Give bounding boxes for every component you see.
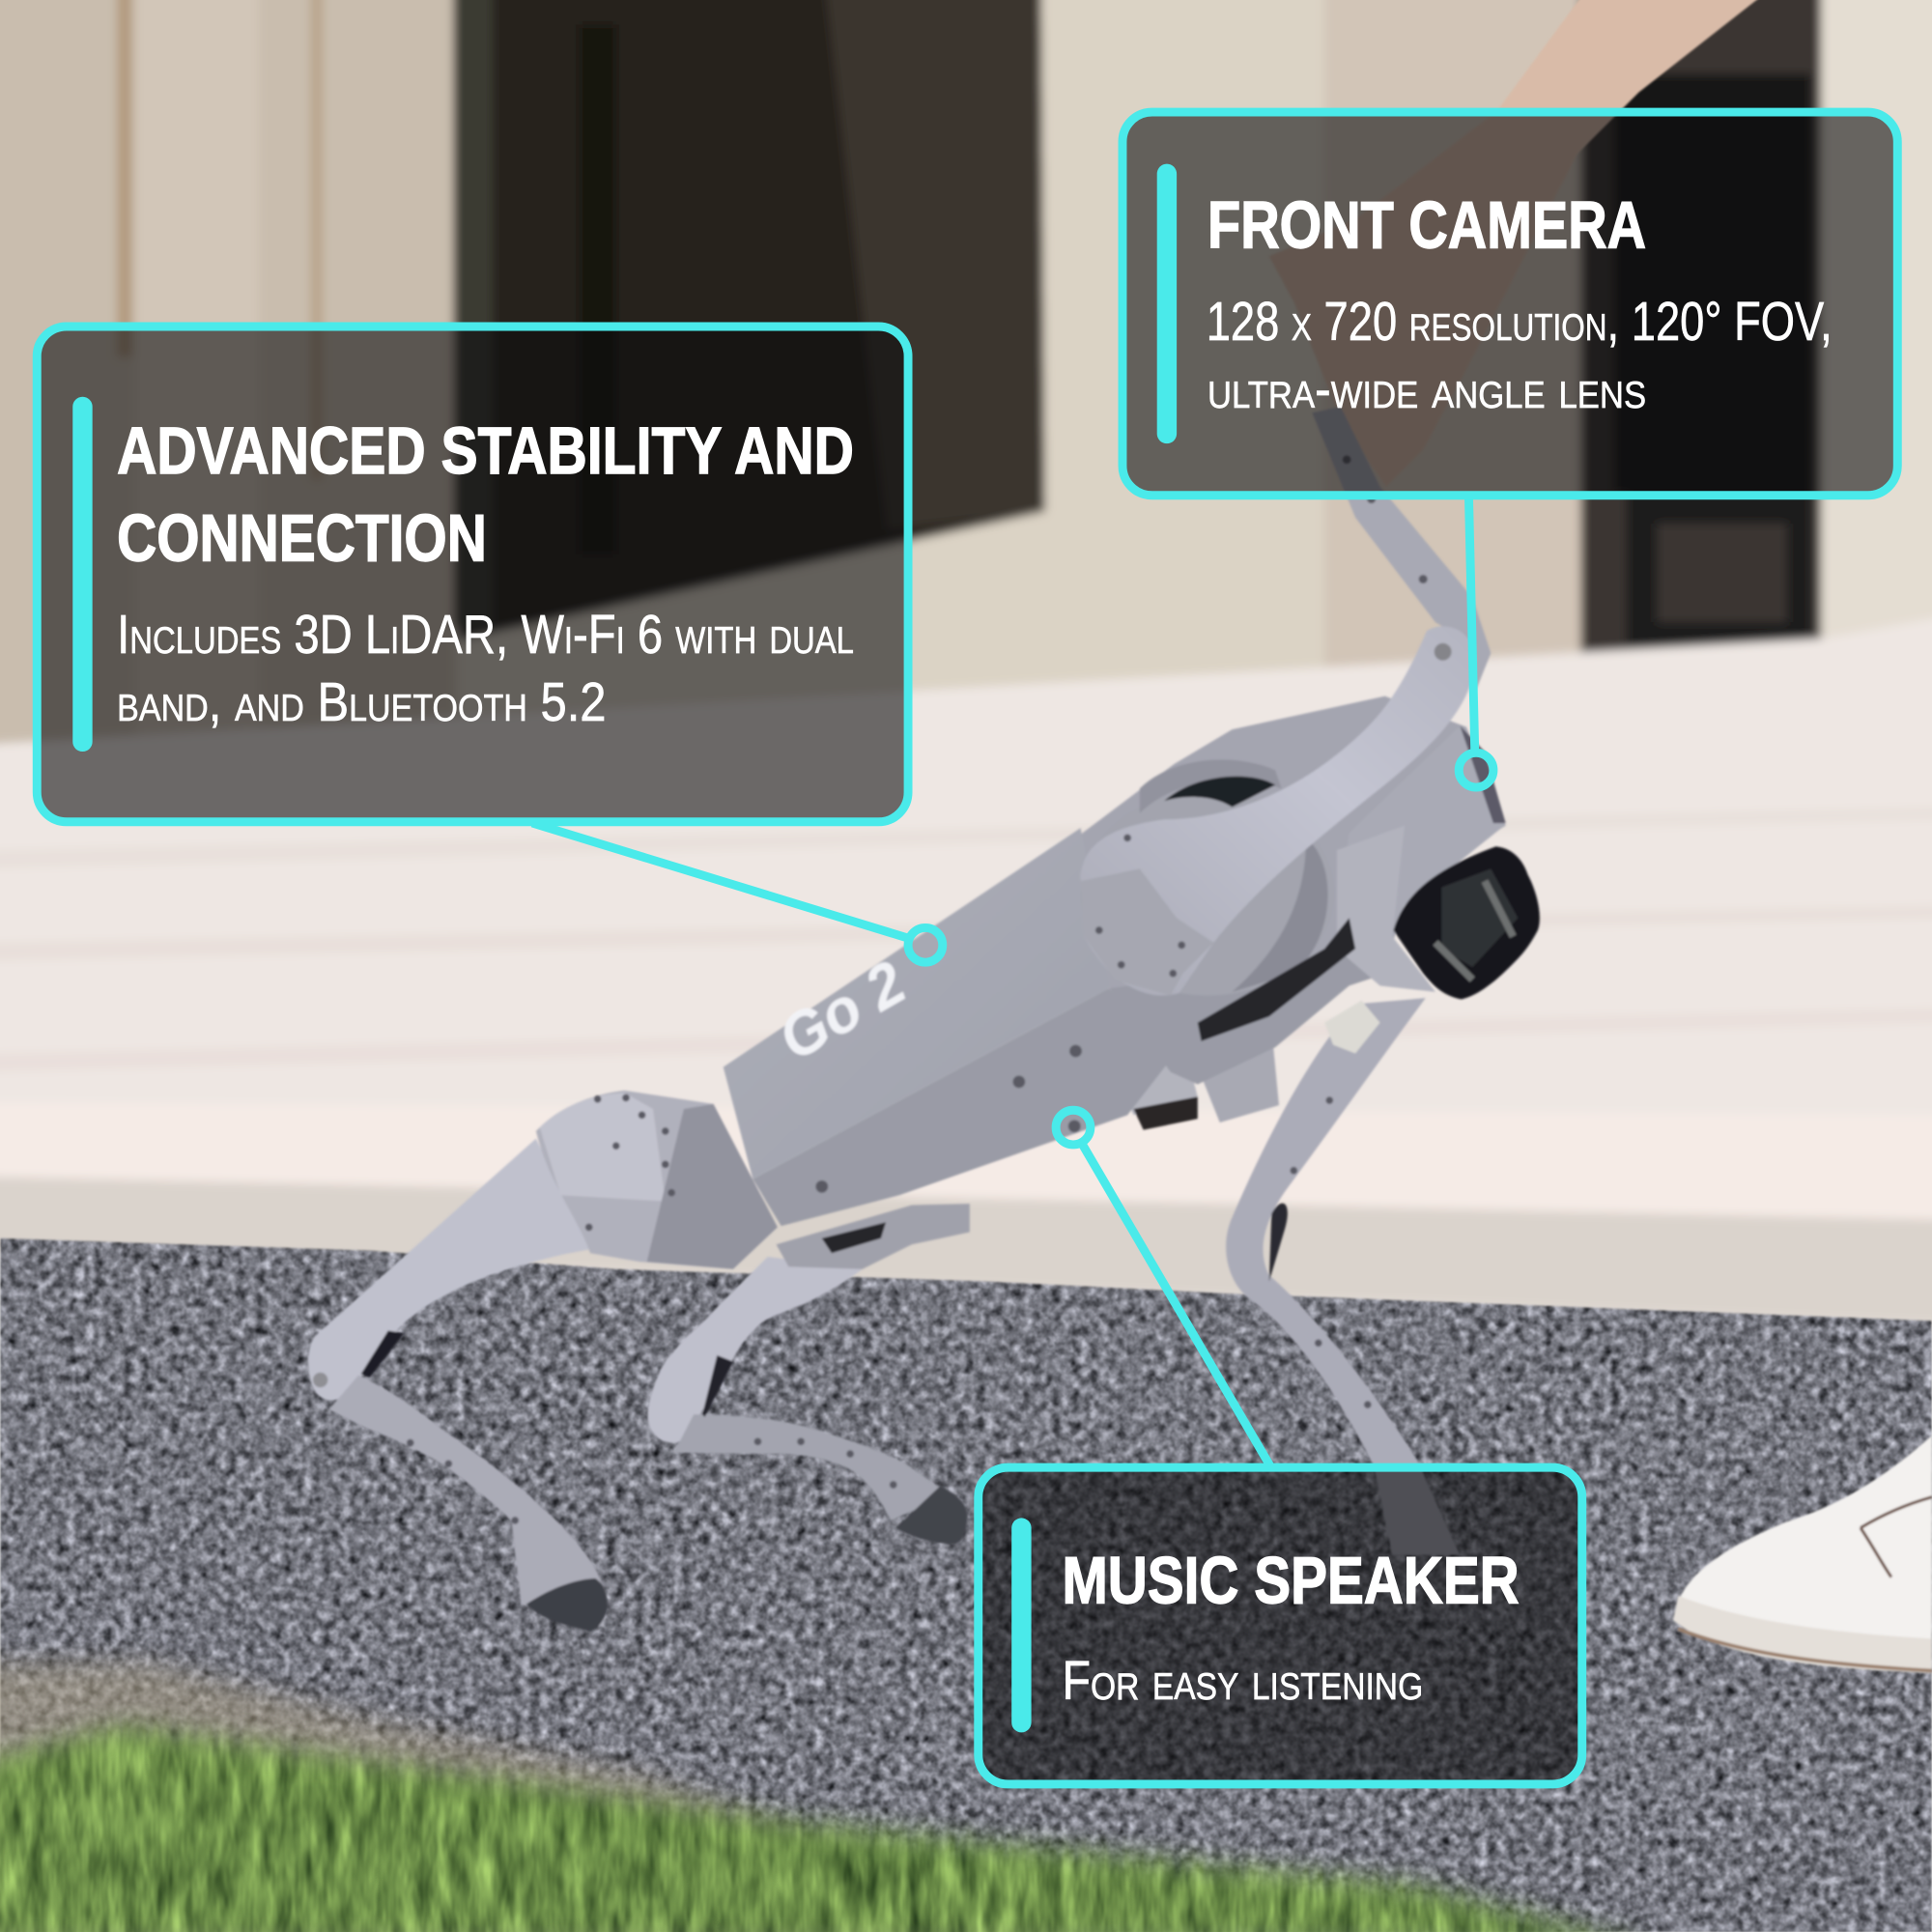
shoulder facet bbox=[1081, 868, 1213, 996]
shoulder arm bbox=[1081, 626, 1476, 995]
rear hip bbox=[536, 1091, 778, 1269]
text: stability description: Includes 3D LiDAR, Wi-Fi 6 with dual bbox=[117, 604, 854, 665]
connector: stability callout bbox=[532, 823, 943, 962]
head bbox=[1337, 725, 1506, 992]
building wall and windows bbox=[0, 0, 1932, 1331]
camera face bbox=[1394, 846, 1540, 999]
gravel ground bbox=[0, 1233, 1932, 1932]
robot dog Go 2 bbox=[308, 407, 1540, 1632]
shoulder disc and internals bbox=[1081, 759, 1355, 1041]
hanging sensor boxes bbox=[777, 1041, 1279, 1269]
white shoe bbox=[1673, 1435, 1932, 1673]
text: music speaker description: For easy listening bbox=[1062, 1650, 1423, 1711]
panel: music speaker bbox=[979, 1467, 1582, 1784]
far rear leg bbox=[648, 1257, 967, 1544]
body upper shell bbox=[724, 828, 1109, 1179]
connector: music speaker callout bbox=[1056, 1110, 1270, 1466]
heading: advanced stability: CONNECTION bbox=[117, 500, 487, 575]
human arm and hand bbox=[1269, 0, 1765, 487]
panel: front camera bbox=[1122, 112, 1897, 496]
heading: music speaker: MUSIC SPEAKER bbox=[1062, 1543, 1520, 1617]
neck underside bbox=[1103, 918, 1386, 1084]
shoulder holes bbox=[1095, 835, 1185, 977]
body holes bbox=[815, 1045, 1082, 1193]
panel: advanced stability and connection bbox=[37, 327, 908, 822]
text: front camera description: ultra-wide angle lens bbox=[1208, 358, 1646, 419]
body lower shell bbox=[753, 988, 1171, 1226]
heading: front camera: FRONT CAMERA bbox=[1208, 187, 1646, 262]
upper back behind shoulder bbox=[1060, 696, 1506, 988]
camera lens detail bbox=[1435, 868, 1518, 980]
heading: advanced stability: ADVANCED STABILITY AND bbox=[117, 413, 854, 488]
connector: front camera callout bbox=[1459, 496, 1493, 787]
text: stability description: band, and Bluetooth 5.2 bbox=[117, 671, 607, 732]
rear near leg bbox=[308, 1139, 608, 1632]
raised leg with holes bbox=[1312, 407, 1491, 690]
dry sand and grass bbox=[0, 1663, 1651, 1932]
Go 2 logo: Go 2 bbox=[767, 947, 917, 1074]
arm joint bolt bbox=[1435, 643, 1452, 661]
front standing leg bbox=[1226, 998, 1460, 1555]
